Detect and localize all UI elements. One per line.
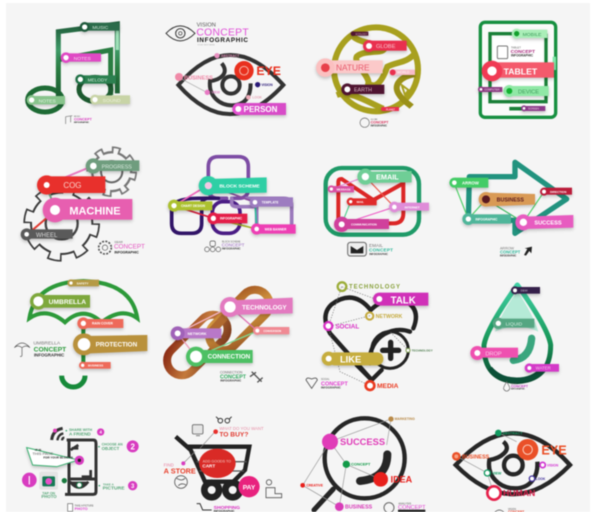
- add to cart badge: CART: [202, 463, 215, 468]
- add to cart badge: ADD GOODS TO: [203, 460, 231, 464]
- callout: tagline: FOR YOUR BLOGAN: [43, 455, 73, 459]
- label: tap on photo: I: [28, 473, 31, 487]
- globe shape: [334, 27, 418, 111]
- label: communication: COMMUNICATION: [351, 223, 377, 227]
- label: like: LIKE: [340, 355, 361, 365]
- panel: email concept: [326, 168, 429, 256]
- eye small labels: VISION: [261, 83, 273, 87]
- vision title: [166, 23, 249, 47]
- small gear: [91, 151, 132, 192]
- label: rain cover: RAIN COVER: [92, 322, 113, 326]
- label: wheel: WHEEL: [36, 233, 58, 239]
- globe caption: GLOBE: [371, 119, 378, 121]
- add to cart badge: [199, 449, 236, 478]
- eye red badge: EYE: [256, 64, 281, 78]
- tablet caption: TABLET: [511, 46, 521, 50]
- connector lines: [303, 419, 391, 507]
- label: concept: CONCEPT: [351, 462, 371, 467]
- label: vision: VISION: [547, 463, 559, 467]
- tablet caption: [497, 46, 535, 59]
- label: mobile: MOBILE: [523, 32, 542, 38]
- connection caption: CONNECTION: [220, 370, 243, 374]
- label: umbrella: UMBRELLA: [49, 299, 86, 306]
- label: business: BUSINESS: [497, 197, 524, 203]
- panel: social heart concept: [306, 282, 433, 390]
- label: liquid: LIQUID: [506, 321, 523, 327]
- label: choose an object: OBJECT: [102, 446, 120, 451]
- panel: gear concept: [21, 151, 145, 255]
- panel: photo app concept: [22, 428, 139, 511]
- label: technology small: TECHNOLOGY: [412, 348, 433, 352]
- drop caption: INFOGRAPHIC: [511, 388, 525, 391]
- gear caption: GEAR: [114, 240, 124, 244]
- label: look: LOOK: [536, 477, 546, 481]
- what do you want to buy: [213, 426, 264, 438]
- chain links: [161, 284, 276, 381]
- vision title: INFOGRAPHIC: [197, 37, 248, 44]
- panel: analysis magnifier concept: [300, 416, 426, 512]
- label: choose an object: 2: [130, 442, 135, 451]
- heart shape: [325, 298, 416, 380]
- umbrella shape: [29, 281, 137, 387]
- arrow caption: [500, 246, 532, 258]
- label: talk: TALK: [391, 295, 416, 306]
- label: success: SUCCESS: [340, 437, 385, 447]
- connection caption: INFOGRAPHIC: [220, 379, 242, 383]
- label: dew: DEW: [521, 289, 528, 293]
- label: social: SOCIAL: [335, 323, 359, 330]
- icon: monitor: [192, 425, 203, 436]
- block scheme caption: BLOCK SCHEME: [222, 242, 241, 244]
- photo caption: PHOTO: [75, 507, 88, 511]
- tablet caption: INFOGRAPHIC: [511, 54, 534, 58]
- globe caption: INFOGRAPHIC: [371, 124, 387, 127]
- label: success: SUCCESS: [534, 220, 562, 226]
- icon: glasses: [216, 417, 232, 423]
- analysis caption: [384, 501, 426, 512]
- dotted lines: [328, 287, 408, 386]
- eye small labels: [175, 53, 273, 100]
- panel: human eye concept: [452, 430, 570, 512]
- label: infographic: INFOGRAPHIC: [220, 217, 243, 221]
- block scheme shape: [172, 157, 292, 233]
- label: connection: CONNECTION: [208, 354, 251, 361]
- label: business: BUSINESS: [345, 505, 373, 511]
- big gear: [30, 192, 93, 255]
- block scheme caption: CONCEPT: [222, 243, 245, 248]
- label: notes green: NOTES: [39, 98, 57, 104]
- music caption: MUSIC: [74, 116, 81, 118]
- vision title: YOUR TEXT HERE: [197, 45, 215, 47]
- vision caption: VISION: [508, 509, 516, 511]
- shopping caption: [197, 504, 240, 512]
- photo caption: [68, 504, 94, 511]
- icon: person at desk: [266, 480, 282, 498]
- callout: tagline: THIS PAGE: [32, 451, 54, 456]
- analysis caption: CONCEPT: [398, 505, 426, 511]
- connector lines: [174, 185, 257, 229]
- music caption: CONCEPT: [74, 118, 93, 122]
- label: block scheme: BLOCK SCHEME: [219, 184, 260, 190]
- connector lines: [454, 183, 544, 222]
- gear caption: INFOGRAPHIC: [114, 250, 139, 254]
- label: technology: TECHNOLOGY: [242, 304, 287, 311]
- connection caption: [220, 370, 263, 383]
- label: business: BUSINESS: [462, 454, 490, 460]
- panel: umbrella concept: [14, 279, 147, 387]
- eye small labels: LOOK: [252, 96, 263, 100]
- panel: music concept: [27, 22, 130, 124]
- label: marketing: MARKETING: [395, 417, 415, 421]
- globe caption: [360, 118, 389, 127]
- shopping caption: SHOPPING: [214, 505, 240, 511]
- panel: block scheme concept: [168, 157, 296, 252]
- dotted links: [183, 432, 215, 463]
- eye small labels: ABSTRACT: [221, 54, 239, 58]
- label: take a picture: PICTURE: [103, 486, 125, 492]
- label: melody: MELODY: [88, 78, 107, 83]
- label: direction: DIRECTION: [550, 190, 566, 194]
- block scheme caption: [205, 241, 245, 252]
- vision title: CONCEPT: [196, 28, 249, 39]
- drop caption: DROP: [511, 383, 517, 385]
- eye small labels: BUSINESS: [184, 75, 213, 81]
- music caption: [66, 116, 93, 124]
- label: idea: IDEA: [391, 475, 413, 485]
- block scheme caption: INFOGRAPHIC: [222, 247, 241, 251]
- find a store: FIND: [164, 462, 174, 467]
- vision caption: [494, 509, 524, 512]
- eye outline: [456, 433, 570, 494]
- label: earth: EARTH: [354, 88, 372, 94]
- label: web banner: WEB BANNER: [265, 227, 287, 231]
- social caption: SOCIAL: [321, 378, 330, 381]
- label: tap on photo: TAP ON: [42, 491, 56, 495]
- label: business: BUSINESS: [88, 364, 103, 368]
- label: progress: PROGRESS: [102, 164, 132, 170]
- what do you want to buy: WHAT DO YOU WANT: [219, 426, 264, 431]
- label: share with a friend: SHARE WITH: [69, 428, 93, 432]
- email frame: [326, 168, 419, 235]
- panel: drop concept: [470, 285, 559, 391]
- small top and bottom labels: ECOLOGY: [356, 34, 368, 36]
- panel: tablet concept: [478, 22, 556, 117]
- label: share with a friend: 4: [99, 430, 102, 435]
- connector lines: [457, 433, 517, 493]
- label: drop: DROP: [485, 351, 502, 357]
- label: tap on photo: PHOTO: [41, 494, 57, 499]
- drop caption: CONCEPT: [511, 384, 529, 388]
- connection caption: CONCEPT: [220, 374, 247, 380]
- wifi arcs icon: [52, 428, 64, 440]
- label: sound: SOUND: [103, 98, 121, 104]
- label: cog: COG: [63, 181, 82, 190]
- drop caption: [504, 382, 529, 391]
- label: screen: SCREEN: [528, 107, 539, 111]
- label: device: DEVICE: [518, 89, 539, 95]
- label: choose an object: [98, 440, 139, 452]
- label: media: MEDIA: [377, 383, 399, 390]
- target dot: [75, 456, 84, 465]
- label: world: WORLD: [397, 71, 410, 75]
- label: share with a friend: A FRIEND: [69, 432, 91, 437]
- arrow outline: [468, 162, 567, 233]
- label: take a picture: [98, 481, 137, 492]
- what do you want to buy: TO BUY?: [219, 431, 248, 438]
- email caption: CONCEPT: [369, 247, 393, 252]
- icon: globe: [175, 476, 187, 488]
- connector lines: [331, 177, 394, 224]
- label: choose an object: CHOOSE AN: [102, 443, 123, 447]
- label: abstract: ABSTRACT: [502, 431, 523, 435]
- find a store: A STORE: [164, 466, 196, 475]
- social caption: CONCEPT: [321, 381, 348, 387]
- cart shape: [176, 437, 249, 497]
- photo caption: TAKE A PICTURE: [75, 504, 94, 507]
- panel: vision eye concept: [166, 23, 286, 115]
- eye orange badge: EYE: [541, 443, 567, 457]
- label: notes pink: NOTES: [74, 56, 92, 62]
- social caption: [306, 378, 348, 390]
- find a store: [164, 461, 196, 475]
- callout: tagline: IT IS: [35, 448, 41, 452]
- label: water: WATER: [536, 366, 551, 371]
- label: message: MESSAGE: [337, 187, 351, 191]
- panel: connection chain concept: [161, 284, 293, 383]
- gear caption: [99, 240, 145, 254]
- person label: PERSON: [244, 105, 278, 114]
- label: arrow: ARROW: [462, 180, 480, 185]
- eye small labels: VIEW: [211, 91, 221, 95]
- label: technology green: TECHNOLOGY: [349, 285, 400, 291]
- panel: arrow concept: [449, 162, 573, 258]
- umbrella caption: UMBRELLA: [33, 340, 61, 346]
- label: take a picture: TAKE A: [103, 482, 115, 486]
- label: safety: SAFETY: [77, 281, 88, 285]
- label: template: TEMPLATE: [262, 201, 278, 205]
- email caption: [348, 242, 393, 256]
- arrow caption: ARROW: [500, 246, 515, 250]
- umbrella caption: INFOGRAPHIC: [34, 353, 64, 358]
- pay badge: PAY: [243, 484, 256, 491]
- label: creative: CREATIVE: [306, 484, 324, 488]
- label: tap on photo: [22, 472, 82, 499]
- email caption: EMAIL: [369, 243, 383, 248]
- gear caption: CONCEPT: [114, 244, 145, 251]
- label: take a picture: 3: [131, 484, 135, 490]
- label: view: VIEW: [492, 471, 502, 475]
- label: nature: NATURE: [336, 63, 370, 73]
- connector lines: [178, 307, 257, 357]
- water drop shape: [484, 285, 551, 382]
- vision title: VISION: [197, 23, 216, 29]
- analysis caption: ANALYSIS: [398, 501, 411, 505]
- label: conversion: CONVERSION: [263, 329, 281, 333]
- umbrella caption: CONCEPT: [34, 346, 66, 353]
- panel: shopping cart concept: [164, 417, 282, 512]
- label: infographic: INFOGRAPHIC: [475, 217, 498, 221]
- email caption: INFOGRAPHIC: [369, 252, 388, 256]
- label: globe: GLOBE: [376, 44, 396, 50]
- magnifier shape: [314, 418, 405, 510]
- label: music: MUSIC: [92, 25, 109, 31]
- small top and bottom labels: [351, 31, 399, 111]
- label: email: EMAIL: [376, 173, 399, 182]
- label: chart design: CHART DESIGN: [181, 204, 206, 208]
- eye outline: [178, 55, 283, 114]
- label: mail: MAIL: [357, 200, 364, 204]
- globe caption: CONCEPT: [371, 121, 389, 125]
- label: tablet: TABLET: [504, 66, 538, 76]
- arrow caption: INFOGRAPHIC: [500, 255, 517, 258]
- label: share with a friend: [65, 428, 104, 437]
- arrow caption: CONCEPT: [500, 250, 521, 255]
- connector lines: [27, 166, 93, 235]
- label: human: HUMAN: [503, 488, 535, 498]
- callout: tagline: [27, 448, 78, 467]
- label: computer: COMPUTER: [484, 88, 500, 92]
- small top and bottom labels: PLANET: [386, 108, 396, 111]
- tablet frame: [480, 22, 556, 117]
- panel: nature globe concept: [316, 27, 418, 127]
- tablet caption: CONCEPT: [511, 49, 535, 55]
- label: network: NETWORK: [376, 314, 403, 320]
- label: machine: MACHINE: [69, 205, 121, 217]
- label: network: NETWORK: [188, 332, 207, 336]
- music caption: INFOGRAPHIC: [74, 121, 90, 124]
- umbrella caption: [14, 340, 66, 358]
- label: internet: INTERNET: [405, 205, 420, 209]
- social caption: INFOGRAPHIC: [321, 386, 341, 390]
- music note shape: [28, 24, 117, 112]
- phone outline: [65, 440, 96, 494]
- label: protection: PROTECTION: [96, 342, 138, 349]
